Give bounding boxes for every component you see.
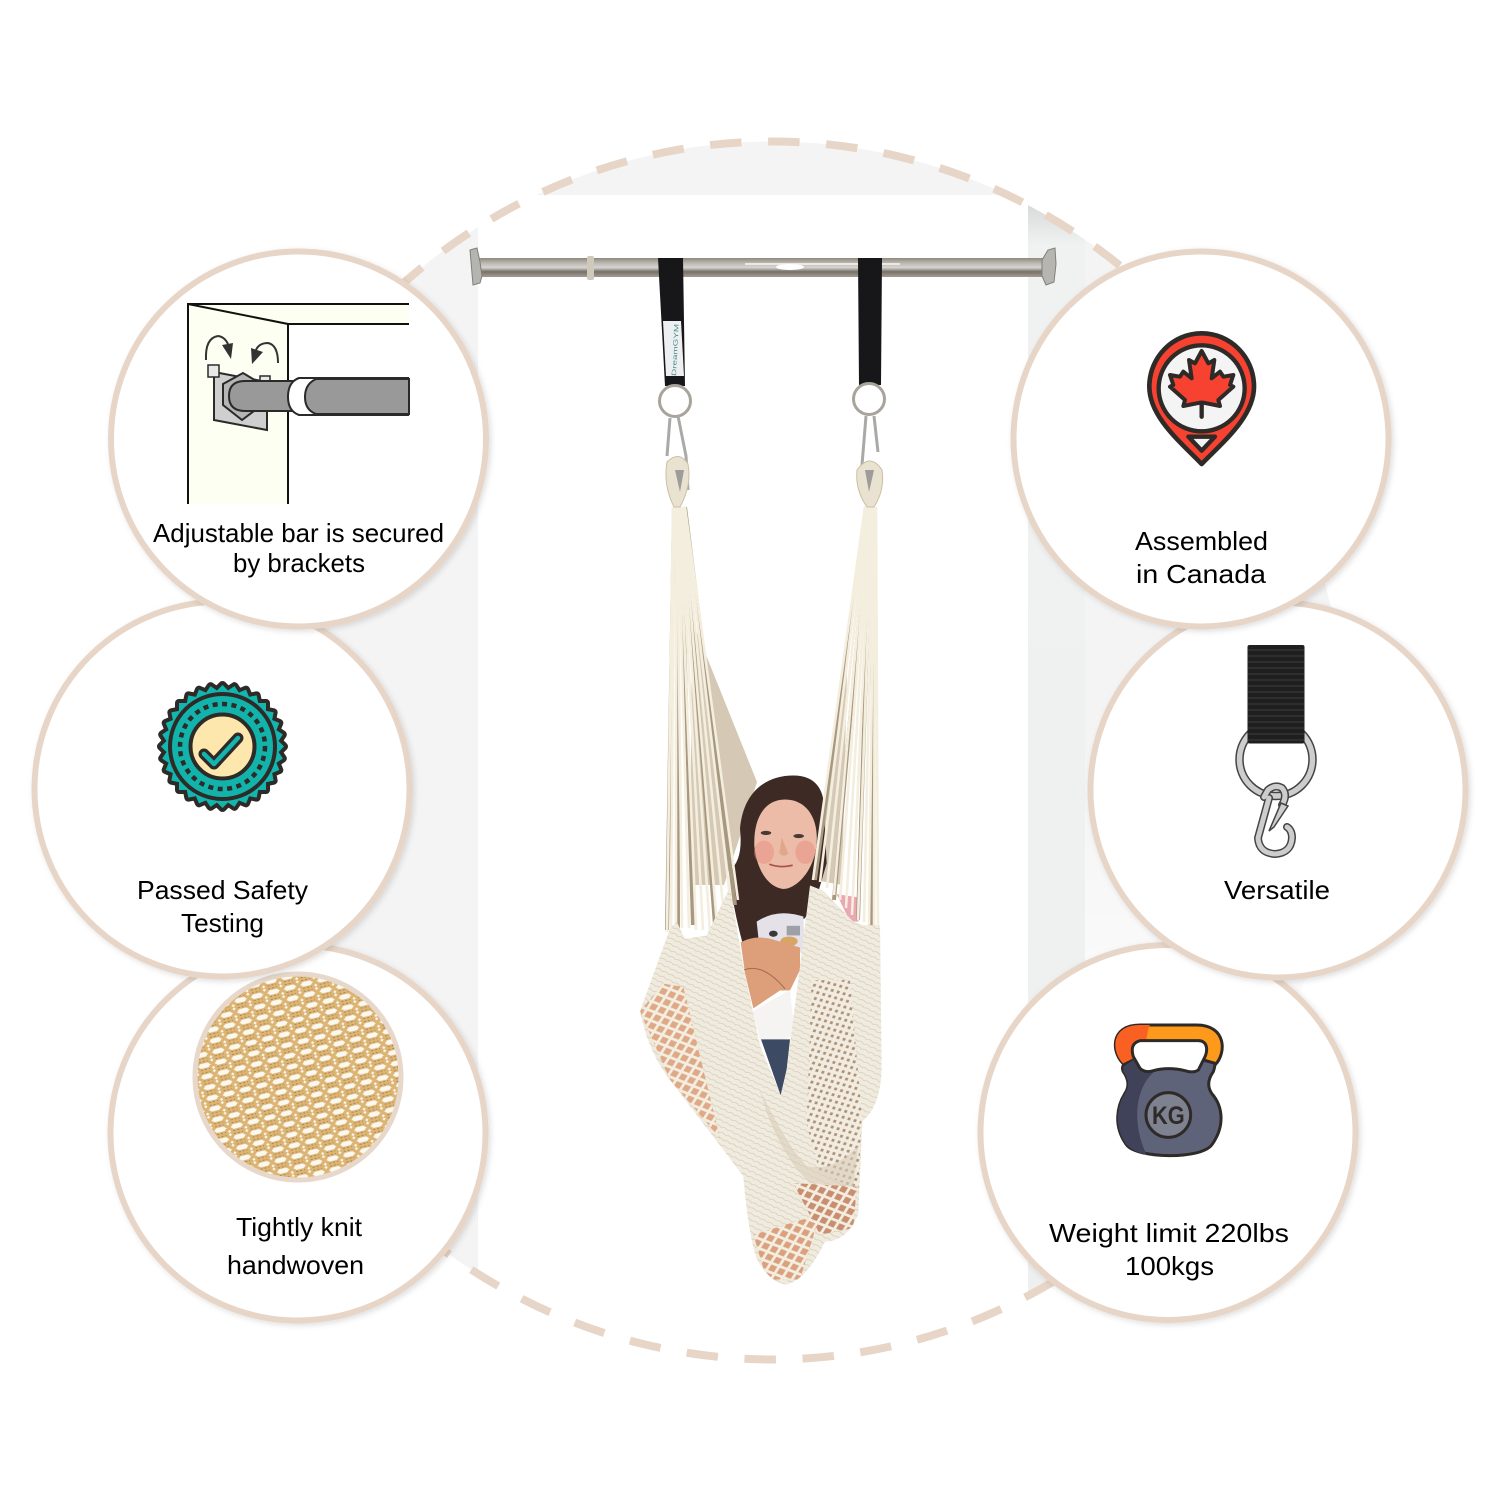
- background doorway inside large circle: [324, 142, 1330, 1291]
- hanging straps and rings: [658, 258, 884, 490]
- child figure: [730, 775, 860, 1095]
- rope end loops: [666, 456, 883, 507]
- label: Adjustable bar is secured: [153, 518, 444, 548]
- arrows showing rotation: [206, 336, 278, 364]
- illustration: bar bracket on door frame: [188, 304, 409, 504]
- woven net seat: [640, 886, 882, 1284]
- back of hammock panels: [690, 620, 848, 885]
- feature: adjustable bar secured by brackets: by brackets: [233, 548, 365, 578]
- feature: weight limit: [980, 945, 1356, 1320]
- label: Tightly knit: [236, 1212, 363, 1242]
- rope weave sample circle: [195, 974, 401, 1180]
- feature: weight limit: 100kgs: [1125, 1251, 1214, 1281]
- feature: adjustable bar secured by brackets: [111, 252, 486, 626]
- label: Versatile: [1224, 875, 1330, 905]
- icon: Canada map pin: [1149, 333, 1254, 464]
- feature: passed safety testing: Testing: [181, 908, 264, 938]
- feature: versatile: [1090, 602, 1466, 978]
- feature: tightly knit handwoven: [110, 946, 486, 1320]
- strap label: DreamGYM: [671, 324, 681, 376]
- pull-up bar: [470, 248, 1056, 285]
- icon: kettlebell: [1115, 1025, 1222, 1156]
- left hanging ropes: [667, 507, 738, 932]
- dashed large circle: [402, 138, 1122, 1364]
- feature: passed safety testing: [34, 602, 410, 976]
- icon: strap with ring and carabiner: [1240, 645, 1312, 854]
- feature: tightly knit handwoven: handwoven: [227, 1250, 364, 1280]
- icon: safety badge: [161, 685, 284, 808]
- strap label: [663, 321, 684, 376]
- hammock and child: [633, 456, 893, 1290]
- icon: kettlebell: KG: [1152, 1103, 1185, 1130]
- feature: assembled in Canada: in Canada: [1136, 559, 1267, 589]
- right hanging ropes: [813, 507, 878, 928]
- label: Weight limit 220lbs: [1049, 1218, 1289, 1248]
- label: Assembled: [1135, 526, 1268, 556]
- label: Passed Safety: [137, 875, 308, 905]
- feature: assembled in Canada: [1014, 252, 1388, 626]
